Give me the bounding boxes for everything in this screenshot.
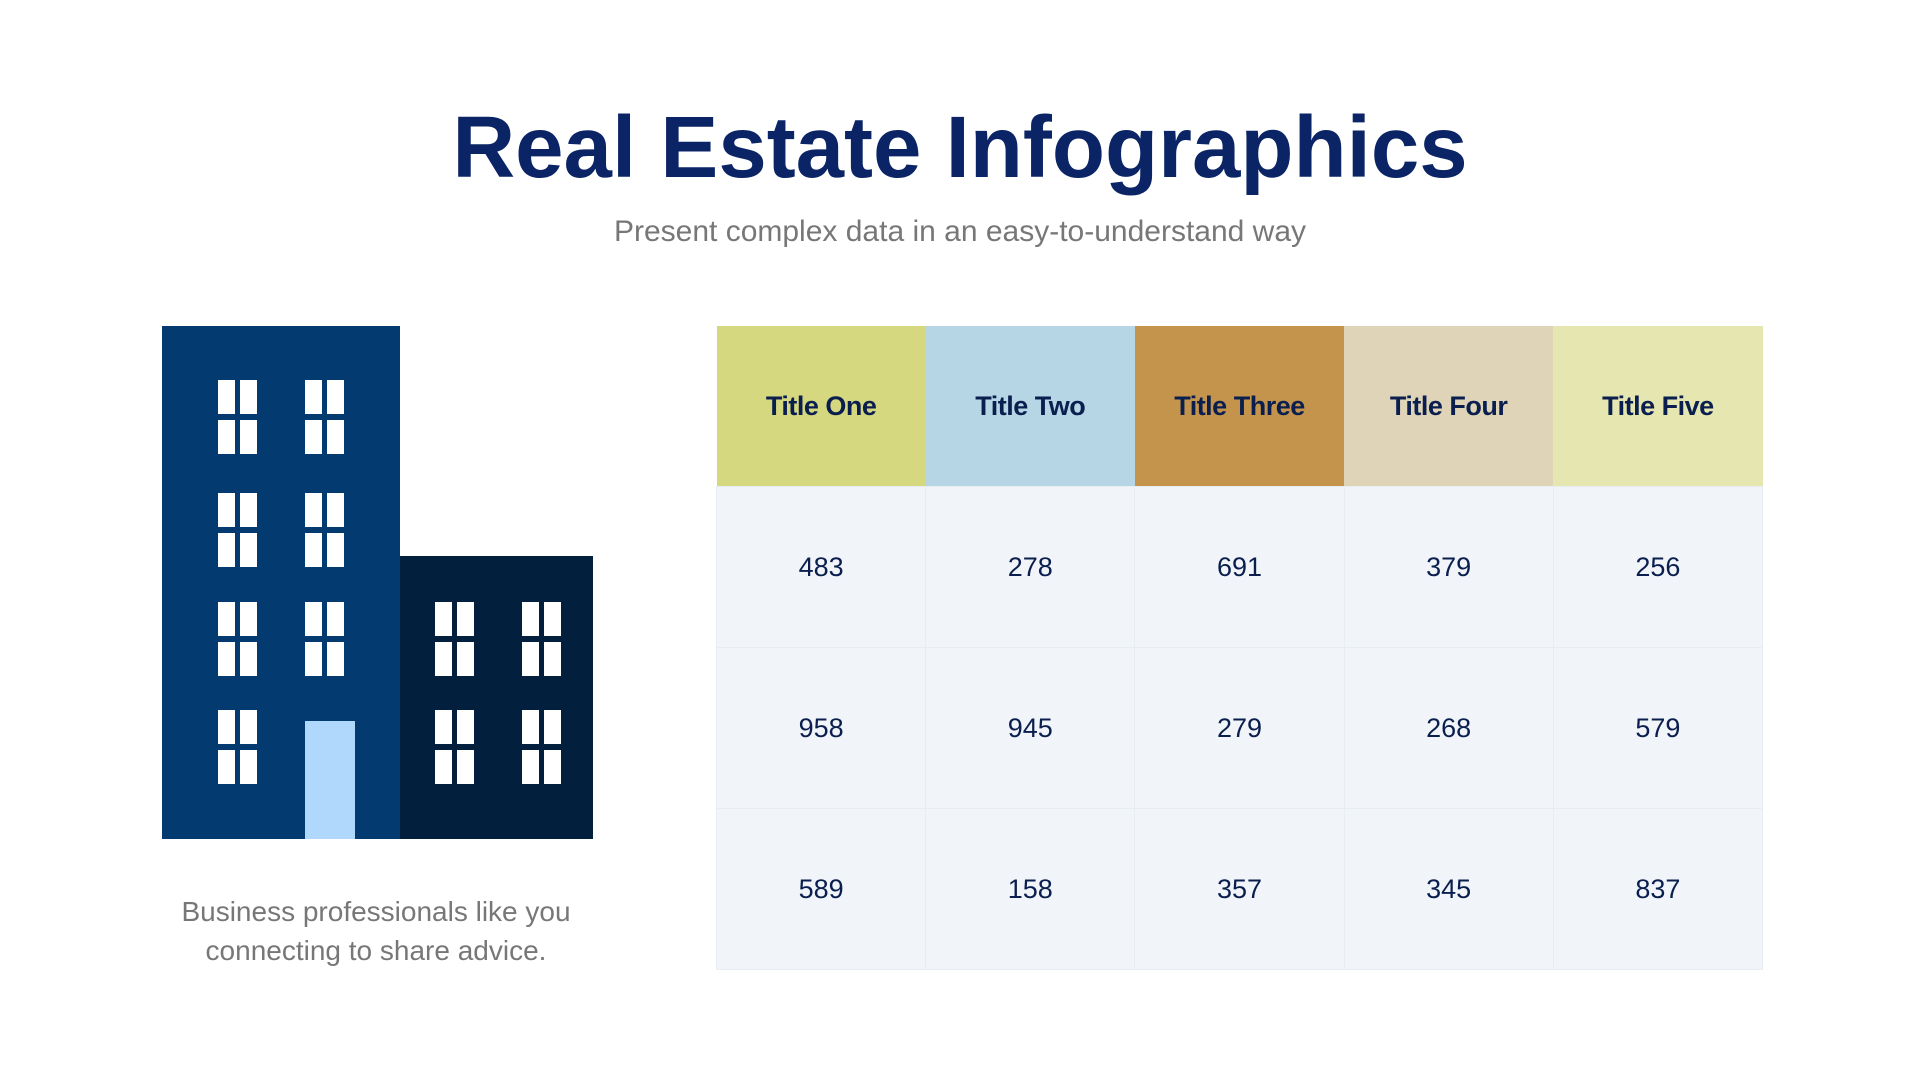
table: 158	[1008, 874, 1053, 904]
caption: Business professionals like you connecting to share advice.	[181, 896, 571, 966]
title: Real Estate Infographics	[452, 99, 1468, 196]
table: 345	[1426, 874, 1471, 904]
table	[716, 326, 1763, 970]
table: Title Five	[1602, 390, 1714, 420]
table: 256	[1635, 552, 1680, 582]
table: 279	[1217, 712, 1262, 742]
table: 483	[799, 552, 844, 582]
table: 579	[1635, 712, 1680, 742]
table: Title Two	[975, 390, 1085, 420]
table: 278	[1008, 552, 1053, 582]
subtitle: Present complex data in an easy-to-understand way	[614, 215, 1306, 248]
table: Title Three	[1174, 390, 1305, 420]
table: 379	[1426, 552, 1471, 582]
table: 837	[1635, 874, 1680, 904]
table: 357	[1217, 874, 1262, 904]
icon: buildings	[162, 326, 593, 839]
table: 945	[1008, 712, 1053, 742]
table: 589	[799, 874, 844, 904]
table: 691	[1217, 552, 1262, 582]
table: Title One	[766, 390, 876, 420]
table: 268	[1426, 712, 1471, 742]
table: Title Four	[1390, 390, 1507, 420]
table: 958	[799, 712, 844, 742]
